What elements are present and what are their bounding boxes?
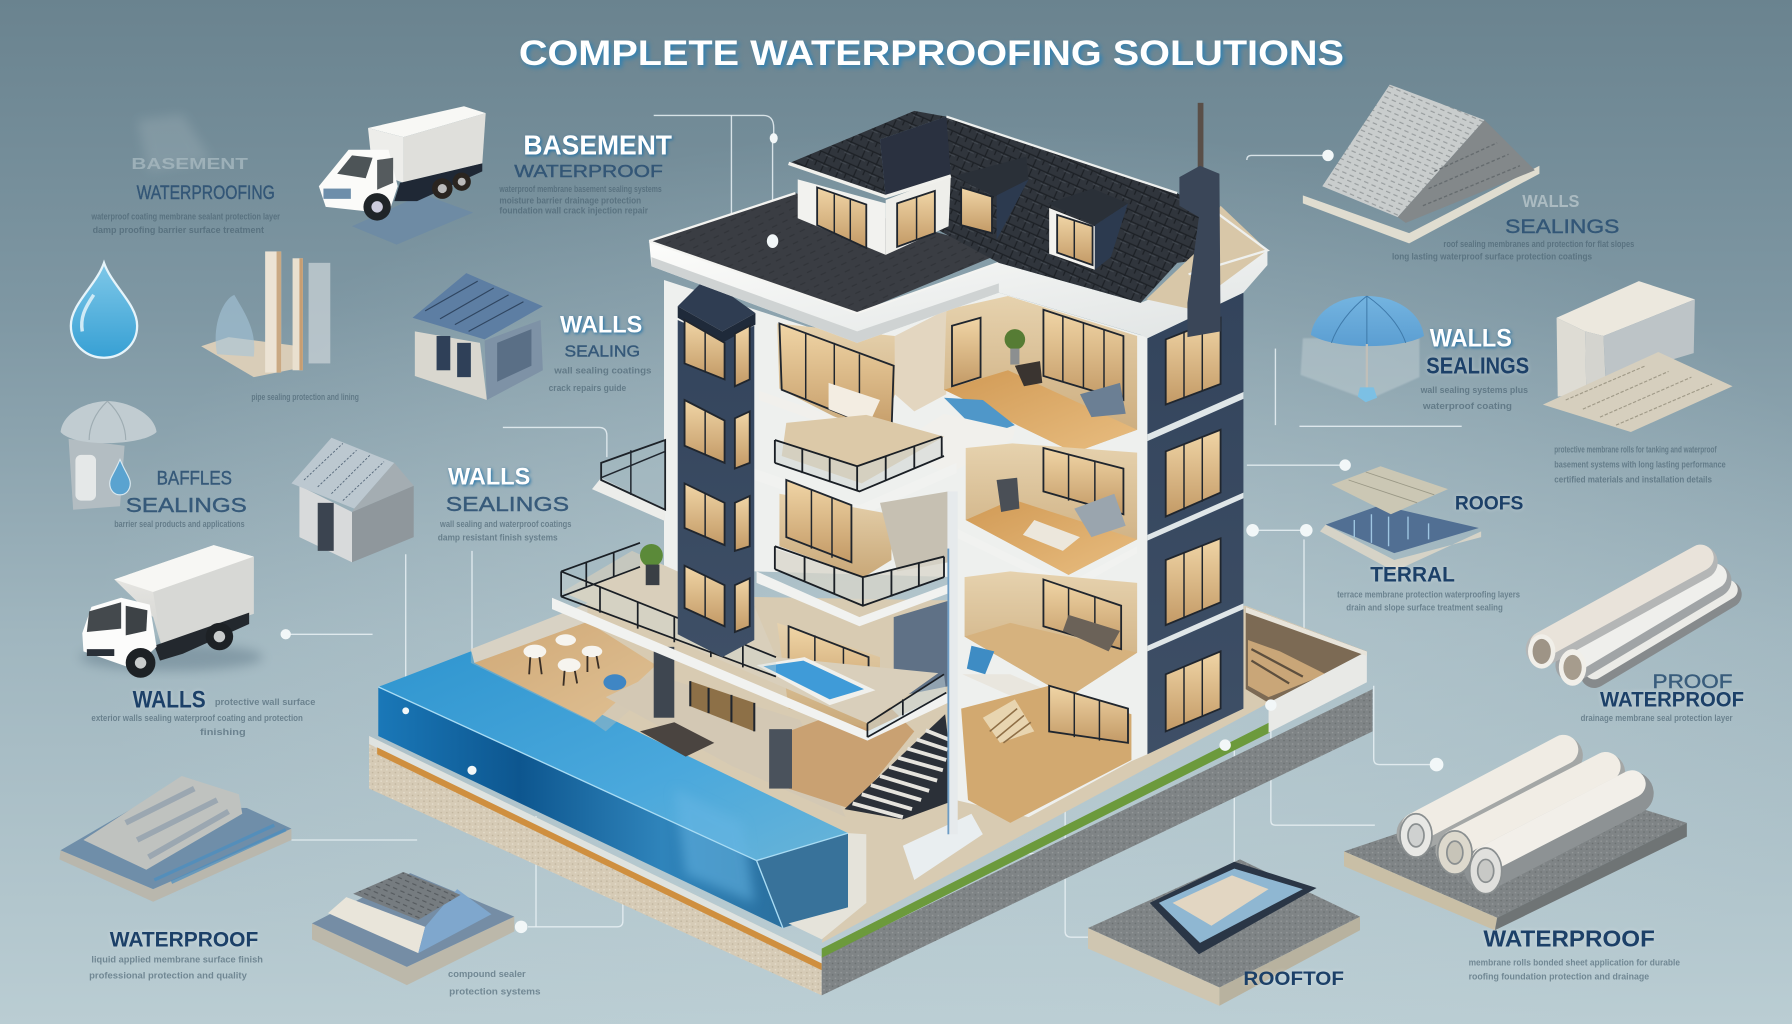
- label: waterproof bottom right: [1469, 925, 1680, 981]
- wooden deck: [471, 603, 657, 731]
- material sample lower: [312, 872, 541, 996]
- label: walls sealings right: SEALINGS: [1426, 353, 1529, 379]
- main white body: [664, 280, 1147, 817]
- label: terrace: terrace membrane protection waterproofing layers: [1337, 590, 1520, 600]
- label: walls sealings right: wall sealing systems plus: [1420, 385, 1528, 395]
- blue umbrella item: [1301, 296, 1424, 402]
- roof: [649, 103, 1267, 343]
- icon: water drop: [71, 263, 137, 358]
- icon: house middle: [291, 438, 414, 562]
- right dark wall: [1147, 293, 1243, 754]
- label: waterproof bottom left: [89, 926, 263, 980]
- label: basement: foundation wall crack injection repair: [499, 206, 648, 216]
- label: baffles sealings: [114, 468, 247, 529]
- label: proof waterproofing right: PROOF: [1653, 671, 1733, 693]
- label: proof waterproofing right: drainage membrane seal protection layer: [1581, 713, 1733, 723]
- text block right: basement systems with long lasting performance: [1554, 459, 1726, 469]
- material sample left: [59, 776, 291, 902]
- label: waterproof bottom left: liquid applied membrane surface finish: [91, 954, 263, 964]
- text block right: [1554, 445, 1726, 484]
- icon: house top: [413, 273, 543, 400]
- layered sheet item: [1320, 466, 1481, 571]
- label: walls sealings top right: WALLS: [1522, 191, 1579, 211]
- label: walls lower left: protective wall surface: [215, 697, 315, 707]
- label: walls lower left: [91, 686, 315, 737]
- label: walls sealing upper: wall sealing coatings: [553, 366, 651, 376]
- back right planter: [1246, 607, 1367, 733]
- pool: [378, 651, 866, 939]
- label: baffles sealings: BAFFLES: [157, 468, 232, 490]
- box and sheets item: [1543, 281, 1733, 432]
- label: walls sealing upper: SEALING: [565, 344, 640, 361]
- label: proof waterproofing right: WATERPROOF: [1600, 686, 1744, 711]
- label: walls sealings right: [1420, 324, 1529, 411]
- tubes right: [1528, 558, 1728, 686]
- label: walls sealings top right: long lasting waterproof surface protection coatings: [1392, 251, 1592, 261]
- upper left room: [759, 323, 1015, 474]
- label: waterproofing top left: [91, 114, 280, 235]
- dots on connector lines: [281, 133, 1443, 933]
- label: walls sealings right: WALLS: [1430, 324, 1512, 352]
- title: COMPLETE WATERPROOFING SOLUTIONS: [519, 33, 1344, 73]
- pipes item: [201, 251, 359, 402]
- label: basement: waterproof membrane basement sealing systems: [499, 184, 662, 194]
- rooftop sample: [1088, 859, 1360, 1006]
- large rolls on slab: [1344, 750, 1687, 930]
- chimney: [1179, 103, 1221, 337]
- label: basement: WATERPROOF: [514, 161, 663, 181]
- platform floor: [471, 594, 1367, 943]
- label: waterproof bottom right: WATERPROOF: [1483, 925, 1655, 951]
- right dormer: [1048, 189, 1128, 270]
- label: walls sealings middle: damp resistant finish systems: [438, 533, 558, 543]
- wall bands: [1147, 392, 1243, 651]
- text block right: protective membrane rolls for tanking and waterproof: [1554, 445, 1717, 455]
- ground right room: [903, 686, 1131, 880]
- mid right room: [955, 443, 1137, 592]
- flat roof: [649, 193, 1006, 313]
- label: walls sealings middle: wall sealing and waterproof coatings: [439, 519, 571, 529]
- lower right room: [962, 571, 1137, 706]
- label: waterproofing top left: WATERPROOFING: [137, 182, 275, 204]
- central pipe: [947, 491, 958, 834]
- rooftop sample: ROOFTOF: [1243, 968, 1344, 990]
- second floor balcony: [754, 415, 957, 517]
- small dormer: [954, 157, 1029, 240]
- label: walls sealings middle: SEALINGS: [446, 493, 569, 516]
- label: baffles sealings: SEALINGS: [126, 494, 247, 517]
- label: waterproof bottom left: WATERPROOF: [110, 926, 258, 951]
- label: walls sealings right: waterproof coating: [1422, 401, 1512, 411]
- label: basement: [499, 129, 672, 216]
- ground level lower terrace: [552, 543, 955, 741]
- label: walls sealings top right: roof sealing membranes and protection for flat slopes: [1443, 239, 1634, 249]
- material sample lower: compound sealer: [448, 969, 526, 979]
- label: walls sealing upper: crack repairs guide: [549, 383, 626, 393]
- label: waterproofing top left: BASEMENT: [131, 156, 248, 173]
- label: walls sealing upper: WALLS: [560, 312, 642, 339]
- pipes item: pipe sealing protection and lining: [251, 392, 359, 402]
- sloped roof: [914, 117, 1267, 303]
- label: waterproof bottom right: membrane rolls bonded sheet application for durable: [1469, 958, 1680, 968]
- label: walls lower left: exterior walls sealing waterproof coating and protection: [91, 713, 303, 723]
- eaves: [649, 241, 1267, 343]
- truck lower: [80, 545, 263, 678]
- label: walls lower left: WALLS: [133, 686, 206, 713]
- lower left room: [777, 600, 951, 731]
- label: basement: moisture barrier drainage protection: [499, 195, 642, 205]
- building on platform: [369, 103, 1373, 995]
- ground level living: [606, 647, 914, 817]
- label: walls lower left: finishing: [200, 727, 246, 737]
- upper middle wall: [895, 310, 946, 411]
- label: walls sealings top right: [1392, 191, 1634, 261]
- balcony left small: [592, 440, 665, 521]
- main dormer: [789, 111, 951, 255]
- label: roofs: ROOFS: [1455, 493, 1523, 515]
- platform base: [369, 689, 1373, 995]
- label: baffles sealings: barrier seal products and applications: [114, 519, 245, 529]
- label: walls sealings middle: WALLS: [448, 464, 530, 491]
- roof sample top right: [1303, 85, 1539, 243]
- label: terrace: [1337, 562, 1520, 612]
- connector lines: [286, 115, 1462, 937]
- truck top: [319, 106, 486, 245]
- dark wall windows: [1166, 318, 1221, 731]
- label: basement: BASEMENT: [523, 129, 672, 160]
- tower: [678, 278, 755, 657]
- label: walls sealing upper: [549, 312, 651, 393]
- label: terrace: TERRAL: [1370, 562, 1455, 587]
- text block right: certified materials and installation details: [1554, 474, 1712, 484]
- label: proof waterproofing right: [1581, 671, 1744, 723]
- upper right room: [944, 296, 1137, 453]
- label: waterproofing top left: damp proofing barrier surface treatment: [93, 225, 264, 235]
- label: walls sealings middle: [438, 464, 571, 543]
- label: waterproof bottom left: professional protection and quality: [89, 970, 248, 980]
- label: walls sealings top right: SEALINGS: [1505, 216, 1619, 238]
- material sample lower: protection systems: [449, 986, 541, 996]
- label: waterproofing top left: waterproof coating membrane sealant protection layer: [91, 211, 280, 221]
- label: terrace: drain and slope surface treatment sealing: [1346, 602, 1503, 612]
- label: waterproof bottom right: roofing foundation protection and drainage: [1469, 971, 1649, 981]
- icon: grey umbrella: [61, 401, 157, 510]
- third floor left: [757, 480, 952, 626]
- stairs: [845, 714, 955, 819]
